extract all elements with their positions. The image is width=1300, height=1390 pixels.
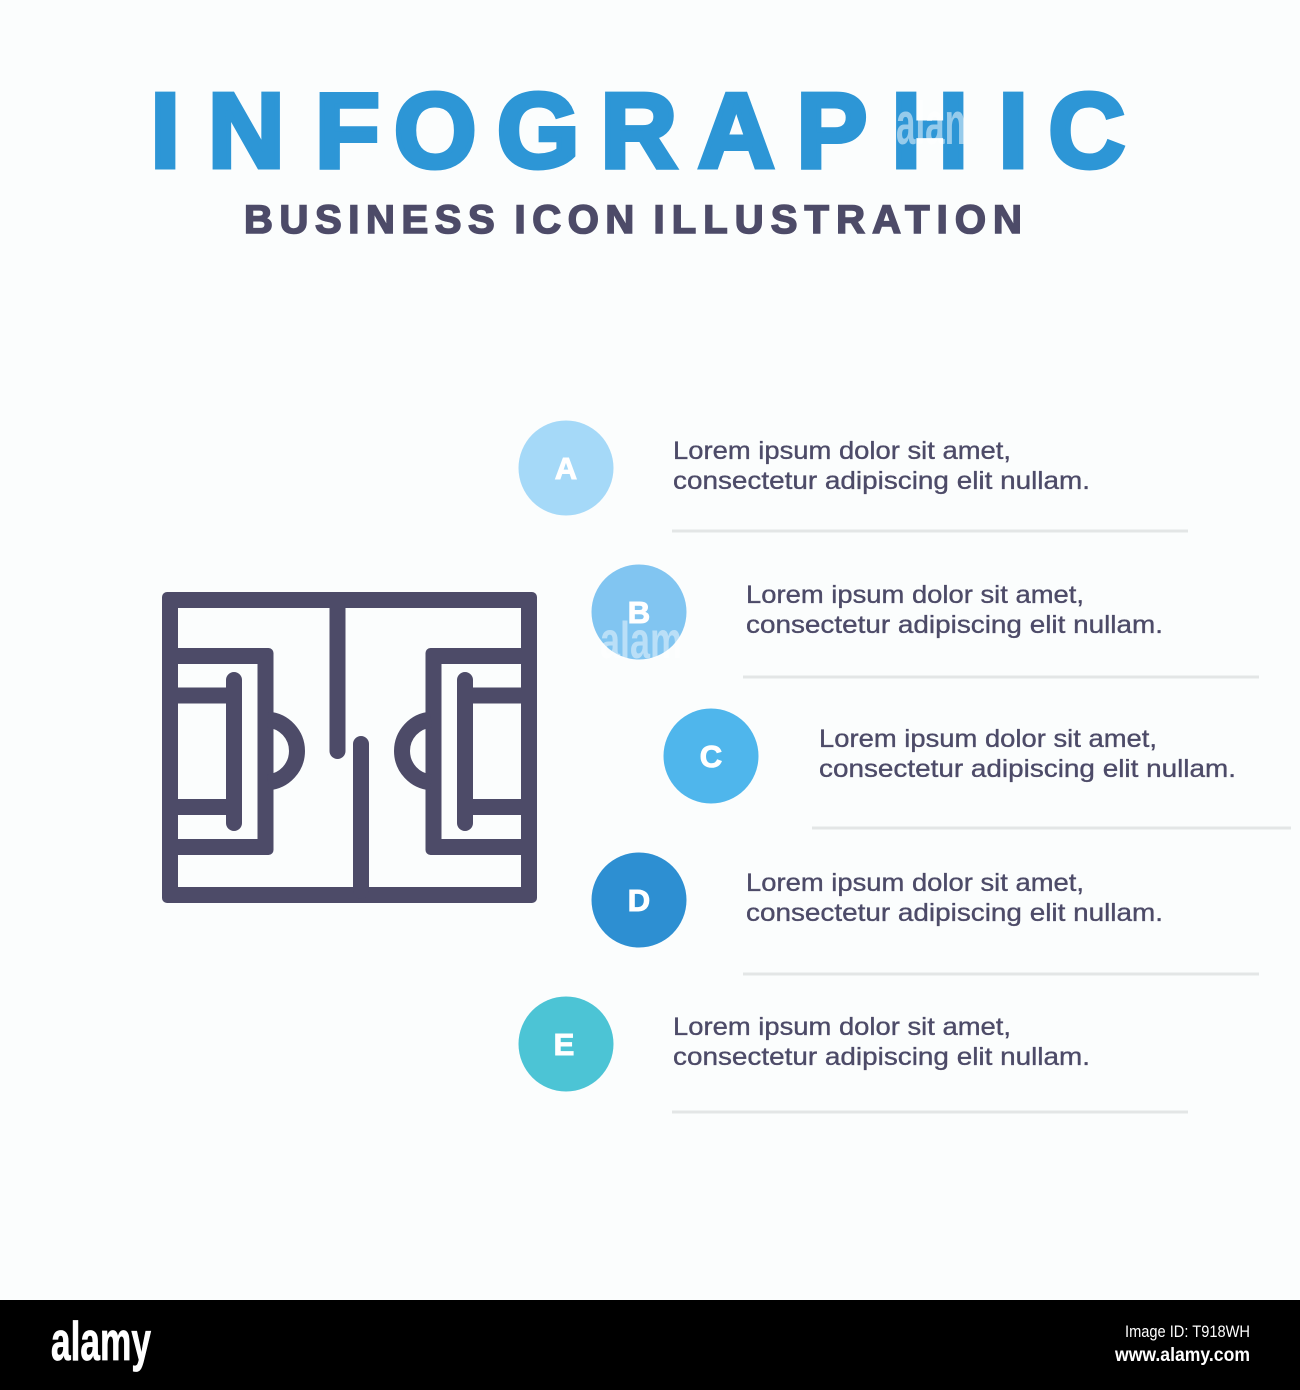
divider D xyxy=(743,972,1259,976)
letter A: A xyxy=(555,451,577,486)
website: www.alamy.com xyxy=(1114,1345,1250,1366)
watermark in title: alan xyxy=(896,90,966,157)
icon: football pitch xyxy=(162,592,537,903)
footer logo: alamy xyxy=(51,1310,151,1372)
item E xyxy=(518,996,1090,1092)
text E: consectetur adipiscing elit nullam. xyxy=(673,1043,1090,1071)
text B: consectetur adipiscing elit nullam. xyxy=(746,611,1163,639)
title: INFOGRAPHIC xyxy=(150,72,1125,190)
divider C xyxy=(812,826,1291,830)
circle A xyxy=(518,420,614,516)
circle E xyxy=(518,996,614,1092)
circle C xyxy=(664,708,758,804)
letter E: E xyxy=(554,1027,574,1062)
item A xyxy=(518,420,1090,516)
subtitle: ICON xyxy=(514,198,641,242)
letter B: B xyxy=(628,595,650,630)
text A: consectetur adipiscing elit nullam. xyxy=(673,467,1090,495)
circle D xyxy=(592,852,686,948)
subtitle: ILLUSTRATION xyxy=(654,198,1029,242)
footer bar xyxy=(0,1300,1300,1390)
text B: Lorem ipsum dolor sit amet, xyxy=(746,581,1084,609)
item D xyxy=(592,852,1163,948)
item C xyxy=(664,708,1236,804)
subtitle: BUSINESS xyxy=(244,198,501,242)
divider E xyxy=(672,1110,1188,1114)
text C: Lorem ipsum dolor sit amet, xyxy=(819,725,1157,753)
image id: Image ID: T918WH xyxy=(1125,1322,1250,1341)
text A: Lorem ipsum dolor sit amet, xyxy=(673,437,1011,465)
circle B xyxy=(592,564,686,660)
divider A xyxy=(672,530,1188,532)
text D: Lorem ipsum dolor sit amet, xyxy=(746,869,1084,897)
letter C: C xyxy=(700,739,722,774)
text D: consectetur adipiscing elit nullam. xyxy=(746,899,1163,927)
text E: Lorem ipsum dolor sit amet, xyxy=(673,1013,1011,1041)
text C: consectetur adipiscing elit nullam. xyxy=(819,755,1236,783)
watermark in circle B: alam xyxy=(600,612,682,670)
item B xyxy=(592,564,1163,670)
divider B xyxy=(743,676,1259,678)
letter D: D xyxy=(628,883,650,918)
